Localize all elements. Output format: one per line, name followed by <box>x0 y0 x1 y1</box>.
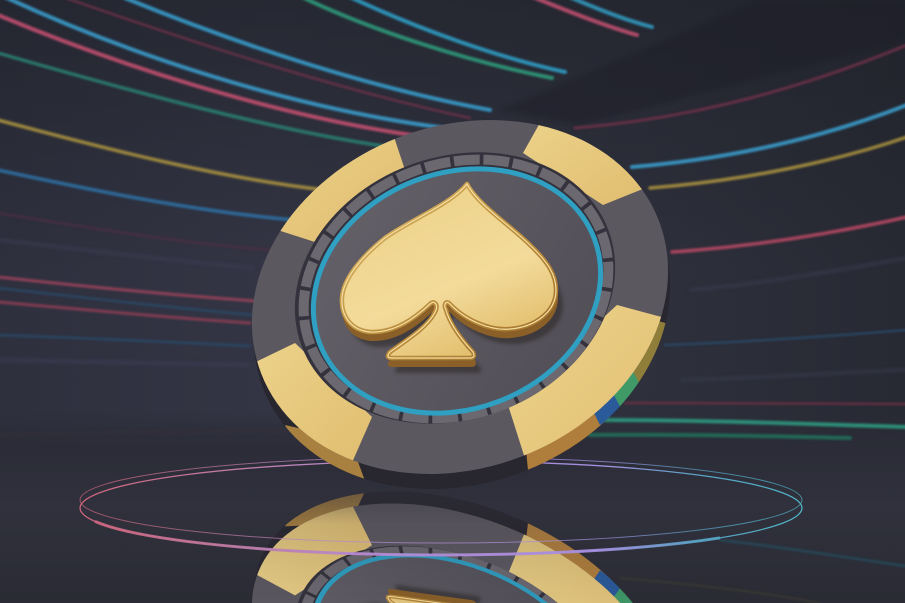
faint background streaks <box>0 240 905 435</box>
poker chip <box>252 120 670 603</box>
inner notched ring <box>255 107 655 469</box>
glowing floor ring <box>80 457 802 555</box>
light streaks: right <box>575 45 905 603</box>
chip face <box>200 61 720 533</box>
light streaks: left and top <box>0 0 652 346</box>
floor reflection of the chip <box>252 493 633 603</box>
chip edge thickness <box>254 264 670 603</box>
gold edge wedges <box>235 105 680 490</box>
gold spade emblem <box>342 184 563 373</box>
